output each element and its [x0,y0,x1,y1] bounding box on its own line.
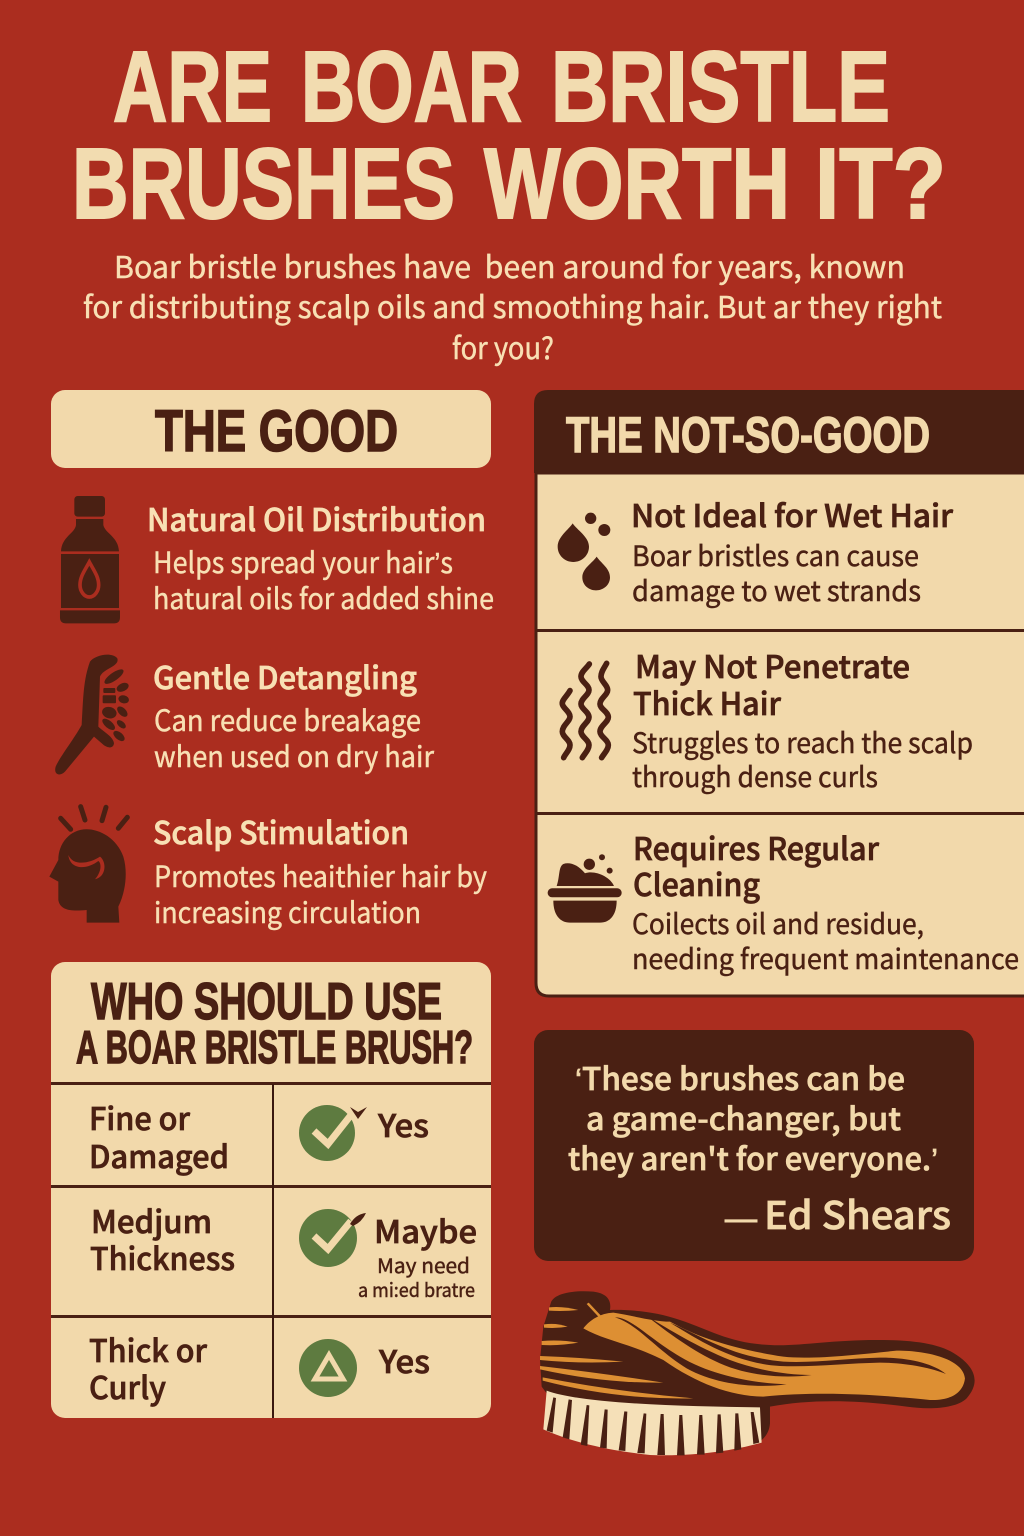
title: IT? [815,128,946,240]
icon: wavy hair [562,663,608,758]
text: requires regular cleaning: needing frequent maintenance [632,938,1019,978]
title: BOAR [301,31,522,143]
text: gentle detangling [153,653,435,776]
heading: who should use: WHO SHOULD USE [91,973,442,1031]
text: gentle detangling: Gentle Detangling [153,653,417,698]
text: natural oil distribution: Helps spread your hair’s [153,540,453,582]
intro text [83,243,942,368]
item: natural oil distribution [60,495,494,623]
text: not ideal for wet hair: damage to wet strands [632,570,921,610]
row: medium thickness [90,1197,477,1303]
item: may not penetrate thick hair [562,642,973,796]
text: not ideal for wet hair: Not Ideal for Wet Hair [631,491,953,536]
text: requires regular cleaning: Cleaning [633,860,760,905]
text: scalp stimulation: Promotes heaithier hair by [154,854,487,896]
row: medium thickness: Medjum [91,1197,212,1242]
row: medium thickness: Maybe [374,1207,477,1252]
item: not ideal for wet hair [558,491,953,610]
row: thick or curly: Yes [378,1337,430,1382]
icon: green check [299,1105,367,1161]
quote box: ‘These brushes can be [575,1054,905,1099]
row: fine or damaged: Fine or [89,1094,190,1139]
title: BRUSHES [72,128,455,240]
row: thick or curly: Curly [89,1363,166,1408]
item: gentle detangling [55,653,435,776]
text: scalp stimulation: Scalp Stimulation [153,808,409,853]
text: may not penetrate thick hair: May Not Penetrate [635,642,910,687]
row: medium thickness: May need [377,1250,470,1279]
icon: head with rays [49,807,127,923]
heading: who should use [76,973,473,1073]
item: requires regular cleaning [548,824,1019,978]
text: not ideal for wet hair [631,491,953,610]
row: thick or curly: Thick or [89,1326,207,1371]
text: scalp stimulation [153,808,487,932]
text: may not penetrate thick hair: Thick Hair [633,679,781,724]
text: scalp stimulation: increasing circulation [154,890,421,932]
text: requires regular cleaning: Requires Regular [633,824,879,869]
quote box: a game-changer, but [586,1094,901,1139]
row: thick or curly [89,1326,430,1408]
text: gentle detangling: Can reduce breakage [154,698,421,740]
intro text: Boar bristle brushes have been around for years, known [114,243,905,287]
heading: who should use: A BOAR BRISTLE BRUSH? [76,1021,473,1073]
row: medium thickness: Thickness [90,1234,235,1279]
item: scalp stimulation [49,807,487,932]
text: not ideal for wet hair: Boar bristles can cause [632,535,919,575]
title [72,31,946,240]
row: fine or damaged [89,1094,429,1177]
text: natural oil distribution: hatural oils for added shine [153,576,494,618]
quote box: Ed Shears [764,1185,951,1240]
text: gentle detangling: when used on dry hair [154,734,435,776]
text: requires regular cleaning [632,824,1019,978]
icon: green check with stroke [299,1209,366,1267]
illustration: boar bristle brush [540,1291,975,1455]
intro text: for you? [452,324,554,368]
text: requires regular cleaning: Coilects oil and residue, [632,903,924,943]
row: fine or damaged: Damaged [89,1132,229,1177]
icon: green triangle [299,1339,357,1397]
title: WORTH [484,128,790,240]
title: ARE [113,31,272,143]
heading: the good [51,390,491,468]
panel: the not-so-good [534,390,1024,996]
icon: water drops [558,513,610,590]
text: natural oil distribution [147,495,494,618]
intro text: for distributing scalp oils and smoothing hair. But ar they right [83,283,942,327]
text: may not penetrate thick hair [632,642,973,796]
heading: the not-so-good [534,390,1024,473]
quote box [534,1030,974,1261]
row: fine or damaged: Yes [377,1101,429,1146]
icon: oil bottle [60,496,120,623]
panel: the good [49,390,494,932]
title: BRISTLE [551,31,890,143]
text: natural oil distribution: Natural Oil Distribution [147,495,486,540]
heading: the good: THE GOOD [155,399,398,464]
quote box: — [725,1200,757,1236]
quote box: they aren't for everyone.’ [568,1134,938,1179]
panel: who should use [51,962,491,1418]
row: medium thickness: a mi:ed bratre [358,1276,475,1303]
icon: bowl with foam [548,854,622,923]
text: may not penetrate thick hair: through dense curls [632,756,878,796]
text: may not penetrate thick hair: Struggles to reach the scalp [632,722,973,762]
icon: brush silhouette [55,655,130,774]
